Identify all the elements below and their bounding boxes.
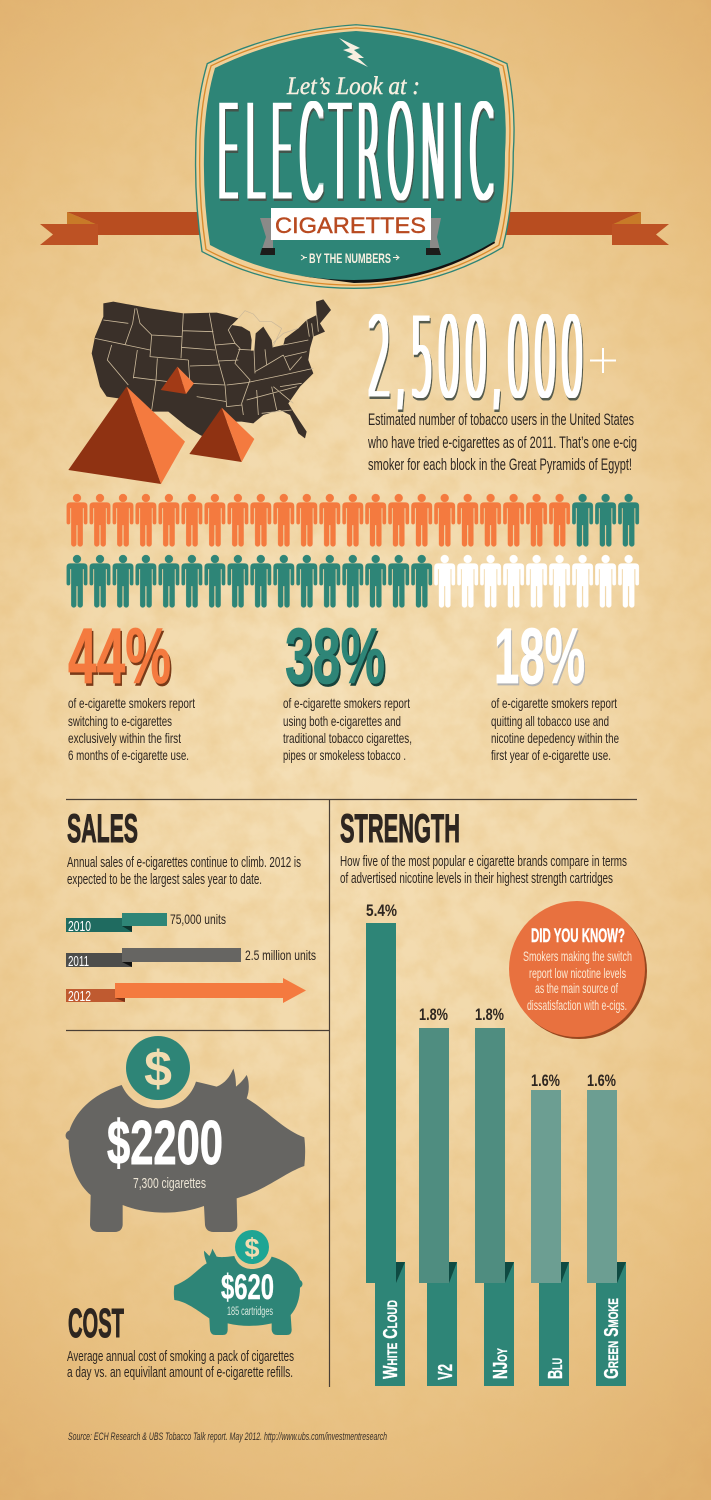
- digits: 2,500,000: [368, 295, 587, 423]
- small piggy bank: [174, 1230, 302, 1335]
- sales bar: 2010: 2010: [68, 919, 91, 935]
- description of tobacco users: [367, 410, 637, 474]
- stat: 18 percent: nicotine depedency within the: [491, 730, 619, 746]
- cost description: a day vs. an equivilant amount of e-cigarette refills.: [67, 1365, 293, 1381]
- stat: 38 percent: [283, 611, 412, 763]
- badge outer teal outline: [196, 25, 514, 288]
- stat: 18 percent: [491, 611, 619, 763]
- bar: Green Smoke: 1.6%: [587, 1071, 616, 1090]
- stat: 44 percent: exclusively within the first: [68, 730, 181, 746]
- bar: White Cloud: White Cloud: [380, 1300, 402, 1379]
- stat: 44 percent: switching to e-cigarettes: [68, 713, 172, 729]
- callout: did you know: Smokers making the switch: [523, 948, 632, 964]
- pictogram: white people: [434, 555, 639, 608]
- bar: Blu: Blu: [545, 1358, 567, 1379]
- stat: 18 percent: 18%: [494, 611, 585, 700]
- banner left fold: [260, 218, 275, 255]
- bar: Blu: 1.6%: [531, 1071, 560, 1090]
- callout: did you know: as the main source of: [535, 980, 618, 996]
- stat: 44 percent: of e-cigarette smokers report: [68, 695, 195, 711]
- stat: 38 percent: pipes or smokeless tobacco .: [283, 747, 406, 763]
- stat: 18 percent: first year of e-cigarette use.: [491, 747, 611, 763]
- bar: Green Smoke: Green Smoke: [601, 1298, 623, 1379]
- cartridge count: 185 cartridges: [227, 1306, 273, 1318]
- bar: V2: 1.8%: [419, 1005, 448, 1024]
- stat: 44 percent: [68, 611, 195, 763]
- stat: 38 percent: traditional tobacco cigarettes,: [283, 730, 412, 746]
- coin: [126, 1036, 190, 1100]
- sales description: [67, 855, 301, 888]
- callout: did you know: dissatisfaction with e-cigs.: [527, 997, 627, 1013]
- stat: 44 percent: 44%: [70, 614, 172, 702]
- pictogram: teal people: [67, 494, 639, 608]
- sales bar: 2010: 75,000 units: [170, 911, 226, 927]
- stat: 18 percent: 18%: [495, 613, 586, 702]
- badge shadow: [300, 240, 495, 283]
- title badge: [196, 25, 514, 288]
- map of the United States: [92, 299, 331, 438]
- big number: [368, 295, 616, 423]
- callout: did you know: [509, 901, 647, 1039]
- cost description: Average annual cost of smoking a pack of cigarettes: [67, 1349, 294, 1365]
- sales arrow: 2012: 2012: [68, 989, 91, 1005]
- stat: 18 percent: of e-cigarette smokers report: [491, 695, 617, 711]
- bar: White Cloud: 5.4%: [366, 901, 397, 920]
- pyramids: [68, 367, 254, 484]
- tagline: Let’s Look at :: [286, 73, 420, 100]
- bar: V2: [419, 1005, 457, 1386]
- badge teal body: [204, 31, 506, 280]
- icon: lightning bolt: [339, 38, 368, 67]
- stat: 38 percent: 38%: [286, 614, 386, 702]
- state borders: [95, 308, 318, 415]
- by the numbers: BY THE NUMBERS: [309, 250, 391, 266]
- stat: 44 percent: 44%: [68, 611, 171, 700]
- subtitle: cigarettes: CIGARETTES: [275, 213, 426, 238]
- stat: 38 percent: 38%: [285, 611, 385, 700]
- left ribbon: [40, 212, 220, 245]
- banner right fold: [426, 218, 441, 255]
- heading: sales: SALES: [67, 807, 138, 851]
- stat: 44 percent: 6 months of e-cigarette use.: [68, 747, 189, 763]
- sales bar: 2011: [66, 947, 316, 970]
- cigarette count: 7,300 cigarettes: [133, 1175, 206, 1192]
- right small arrow: [393, 255, 399, 260]
- callout: did you know: DID YOU KNOW?: [531, 926, 625, 947]
- callout: did you know: report low nicotine levels: [529, 965, 626, 981]
- sales bar: 2010: [66, 911, 226, 935]
- small coin: [235, 1230, 269, 1264]
- stat: 18 percent: quitting all tobacco use and: [491, 713, 609, 729]
- white banner: [271, 208, 431, 240]
- sales description: Annual sales of e-cigarettes continue to climb. 2012 is: [67, 855, 301, 871]
- title: electronic: ELECTRONIC: [217, 79, 499, 229]
- small pyramid: [161, 367, 194, 394]
- coin dollar sign: $: [144, 1041, 172, 1097]
- bar: Green Smoke: [587, 1071, 626, 1386]
- bar: White Cloud: [366, 901, 405, 1386]
- bar: V2: V2: [435, 1364, 457, 1380]
- stat: 38 percent: using both e-cigarettes and: [283, 713, 401, 729]
- left small arrow: [301, 255, 307, 260]
- strength description: [340, 854, 627, 887]
- cost description: [67, 1349, 294, 1381]
- small amount: $620: [221, 1268, 274, 1307]
- medium pyramid: [189, 408, 254, 462]
- big piggy bank: [66, 1036, 305, 1232]
- pictogram: orange people: [67, 494, 570, 546]
- bar: NJoy: [475, 1005, 514, 1386]
- text: COST: [68, 1300, 124, 1346]
- bar: NJoy: 1.8%: [475, 1005, 504, 1024]
- sales arrow: 2012: [66, 978, 306, 1005]
- bar: Blu: [531, 1071, 569, 1386]
- bar: NJoy: NJoy: [490, 1348, 512, 1379]
- sales description: expected to be the largest sales year to date.: [67, 872, 262, 888]
- sales bar: 2011: 2011: [68, 954, 89, 970]
- stat: 38 percent: of e-cigarette smokers report: [283, 695, 410, 711]
- big pyramid: [68, 387, 185, 484]
- sales bar: 2011: 2.5 million units: [245, 947, 316, 963]
- right ribbon: [490, 212, 669, 245]
- small coin dollar sign: $: [244, 1233, 260, 1263]
- heading: strength: STRENGTH: [340, 807, 460, 851]
- plus sign: [590, 348, 616, 373]
- amount: $2200: [107, 1109, 223, 1178]
- source note: Source: ECH Research & UBS Tobacco Talk report. May 2012. http://www.ubs.com/investmentresearch: [68, 1431, 387, 1443]
- badge orange outline: [200, 28, 510, 285]
